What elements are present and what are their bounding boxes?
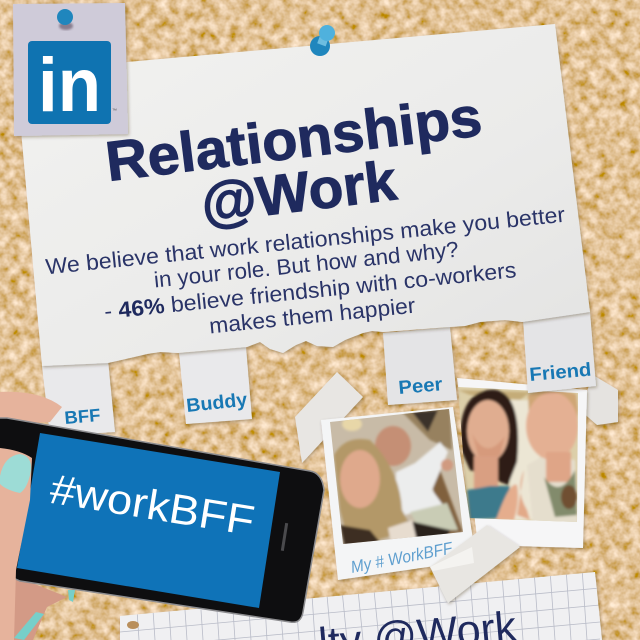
linkedin sticky note (13, 3, 128, 136)
main torn paper note (21, 24, 590, 366)
hand behind phone: fingers (0, 392, 67, 640)
photo: woman and man (330, 409, 463, 544)
title: Relationships (102, 84, 485, 193)
tab: Friend (523, 312, 596, 393)
photo: two women (458, 387, 578, 522)
intro text (44, 202, 566, 338)
phone screen (17, 433, 280, 608)
pin: large blue (310, 25, 335, 56)
intro text: - 46% believe friendship with co-workers (103, 257, 517, 324)
tape: bottom (430, 525, 520, 603)
fingernail: lower finger (14, 612, 44, 640)
intro text: makes them happier (208, 293, 416, 338)
polaroid: friends (450, 378, 587, 548)
thumb (0, 448, 32, 640)
tab: Buddy: Buddy (185, 390, 249, 417)
intro text: in your role. But how and why? (153, 237, 460, 292)
tab: Buddy (179, 347, 252, 424)
handwritten caption: My # WorkBFF (349, 538, 455, 577)
title (102, 84, 485, 235)
intro text: We believe that work relationships make you better (44, 202, 566, 279)
linkedin logo: ™ (112, 108, 117, 114)
tab: Peer (383, 327, 457, 405)
phone speaker (281, 523, 288, 551)
linkedin logo: in (38, 43, 101, 128)
hashtag text: #workBFF (47, 465, 258, 544)
title: @Work (198, 148, 401, 235)
tape: right (580, 375, 618, 425)
tab: BFF: BFF (64, 405, 101, 428)
tab: BFF (42, 360, 115, 436)
tape: left (295, 372, 363, 463)
graph paper note (120, 568, 602, 640)
polaroid: my workBFF (321, 405, 476, 580)
phone (0, 418, 324, 622)
pin: small blue (57, 9, 73, 30)
thumbnail (0, 454, 31, 493)
tab: Friend: Friend (529, 360, 592, 386)
fingernail: middle finger (68, 590, 75, 602)
tab: Peer: Peer (398, 374, 444, 399)
